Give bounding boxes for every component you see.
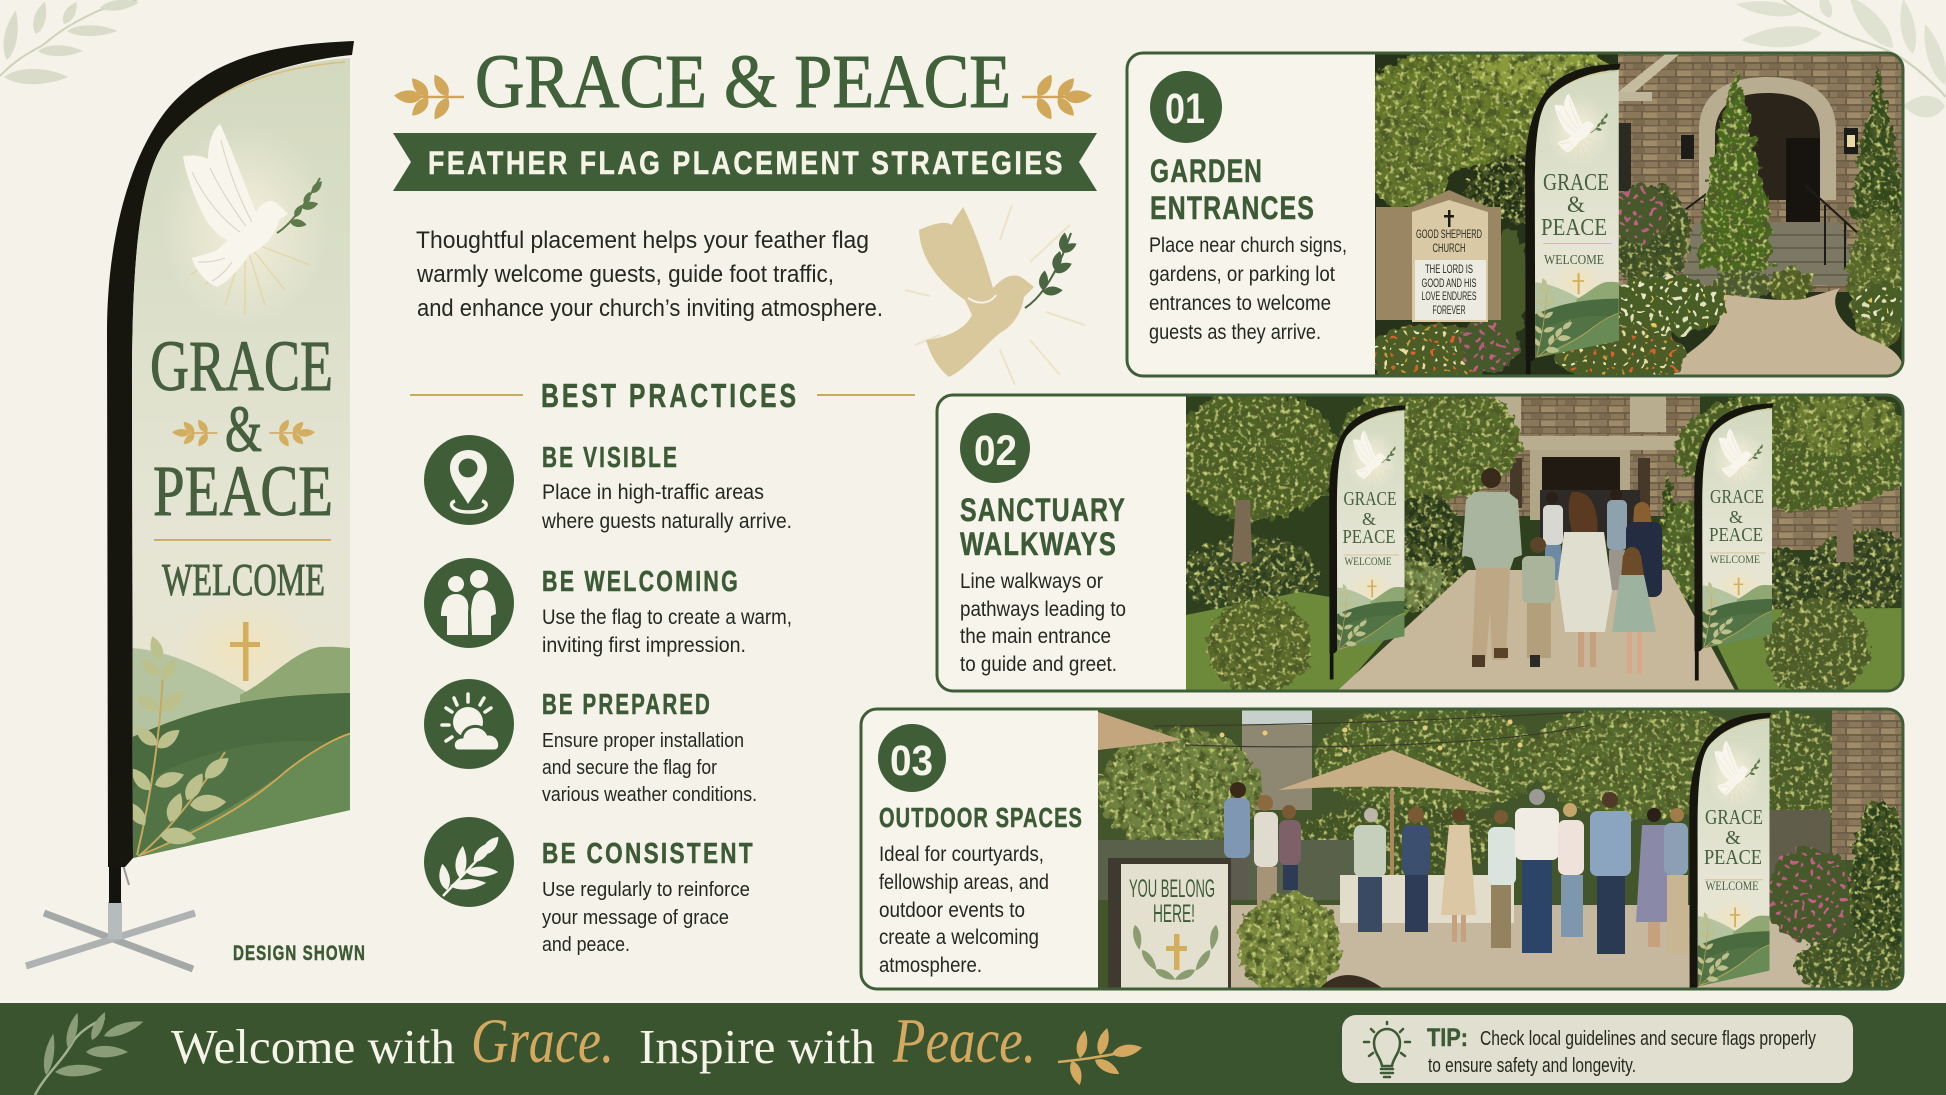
flag base <box>26 865 195 969</box>
decorative leaves: top left <box>0 0 139 84</box>
right mini flag: & <box>1729 507 1743 527</box>
subtitle banner: FEATHER FLAG PLACEMENT STRATEGIES <box>428 145 1065 181</box>
icon: sun and cloud <box>424 679 514 769</box>
courtyard ground <box>1220 905 1820 990</box>
number badge 02 <box>960 413 1030 483</box>
walkway <box>1336 570 1736 692</box>
photo: courtyard gathering <box>1098 700 1910 997</box>
footer slogan: Inspire with <box>639 1019 875 1074</box>
mini flag: GRACE <box>1705 805 1763 829</box>
tip text: to ensure safety and longevity. <box>1428 1055 1636 1077</box>
practice: be prepared: BE PREPARED <box>542 689 712 721</box>
subtitle banner <box>393 133 1097 191</box>
section heading: best practices: BEST PRACTICES <box>541 377 799 414</box>
description: pathways leading to <box>960 598 1126 621</box>
sign: you belong here: HERE! <box>1153 900 1195 928</box>
practice: be consistent: Use regularly to reinforce <box>542 879 750 901</box>
gathered people <box>1224 782 1688 954</box>
description <box>879 843 1049 977</box>
church sign: CHURCH <box>1432 241 1466 255</box>
arched entrance <box>1699 77 1836 200</box>
tree trunks <box>1232 500 1252 562</box>
flag lettering: WELCOME <box>162 554 325 605</box>
mini flag: WELCOME <box>1706 878 1759 893</box>
description: outdoor events to <box>879 899 1025 922</box>
flag lettering <box>150 326 333 605</box>
lanterns <box>1681 135 1694 159</box>
practice: be welcoming: Use the flag to create a warm, <box>542 606 792 629</box>
church stone wall <box>1618 52 1908 292</box>
intro paragraph: and enhance your church’s inviting atmosphere. <box>417 295 883 322</box>
panel 01: garden entrances <box>1127 40 1917 387</box>
mini flag: & <box>1725 827 1741 849</box>
description: gardens, or parking lot <box>1149 263 1335 286</box>
icon: two people <box>424 558 514 648</box>
flower beds <box>1368 185 1917 387</box>
heading <box>1150 153 1315 226</box>
string lights <box>1155 712 1590 747</box>
number badge 03 <box>878 724 946 792</box>
photo: family on walkway <box>1186 396 1902 690</box>
flag lettering: PEACE <box>153 451 333 531</box>
description <box>1149 234 1347 344</box>
lawns <box>1186 592 1410 692</box>
description: Ideal for courtyards, <box>879 843 1044 866</box>
practice: be prepared: Ensure proper installation <box>542 730 744 752</box>
mini flag: WELCOME <box>1544 253 1604 268</box>
right mini flag: PEACE <box>1709 524 1763 546</box>
flag lettering: & <box>225 393 262 466</box>
heading: WALKWAYS <box>960 526 1117 562</box>
number badge 03: 03 <box>890 737 933 785</box>
intro paragraph <box>416 227 883 322</box>
heading: GARDEN <box>1150 153 1263 189</box>
number badge 01 <box>1150 71 1222 143</box>
description: fellowship areas, and <box>879 871 1049 894</box>
practice: be welcoming: BE WELCOMING <box>542 566 740 598</box>
mini flag: PEACE <box>1704 845 1762 869</box>
icon: lightbulb <box>1364 1022 1410 1077</box>
left mini flag: & <box>1362 509 1376 529</box>
practice: be visible: BE VISIBLE <box>542 442 679 474</box>
practice: be consistent: BE CONSISTENT <box>542 838 755 870</box>
panel 03: outdoor spaces <box>861 700 1910 997</box>
sign: you belong here: YOU BELONG <box>1129 875 1215 903</box>
building <box>1440 396 1700 516</box>
mini flag <box>1689 713 1771 989</box>
footer sprig left <box>35 1010 145 1095</box>
church sign: GOOD AND HIS <box>1422 276 1476 290</box>
footer slogan: Grace. <box>471 1005 614 1076</box>
icon: location pin <box>424 435 514 525</box>
gold sprig right <box>1022 72 1092 123</box>
decorative leaves: top right <box>1735 0 1946 117</box>
table <box>1340 875 1514 923</box>
heading: ENTRANCES <box>1150 190 1315 226</box>
cypress trees <box>1610 68 1912 350</box>
tip text: Check local guidelines and secure flags properly <box>1480 1028 1816 1050</box>
practice: be visible: where guests naturally arrive. <box>541 510 792 533</box>
left mini flag: WELCOME <box>1344 554 1392 568</box>
heading <box>960 492 1126 562</box>
title: GRACE & PEACE <box>475 40 1011 124</box>
church sign: GOOD SHEPHERD <box>1416 227 1482 241</box>
description: Line walkways or <box>960 570 1103 593</box>
description: to guide and greet. <box>960 653 1117 676</box>
footer gold sprig <box>1058 1027 1143 1086</box>
flag gold sprigs <box>172 418 315 448</box>
icon: gold dove with olive branch <box>905 205 1085 385</box>
left mini flag: GRACE <box>1344 488 1396 510</box>
mini flag <box>1525 64 1620 378</box>
number badge 02: 02 <box>974 427 1017 475</box>
practice: be consistent: your message of grace <box>542 907 729 929</box>
flag lettering: GRACE <box>150 326 333 406</box>
footer slogan <box>171 1005 1036 1076</box>
left mini flag: PEACE <box>1342 526 1396 548</box>
steps and railing <box>1680 222 1862 285</box>
practice: be prepared: and secure the flag for <box>542 757 717 779</box>
walking family <box>1462 468 1662 674</box>
footer band <box>0 1003 1946 1095</box>
shrubs <box>1208 597 1870 697</box>
church sign: FOREVER <box>1432 303 1466 317</box>
right mini flag: GRACE <box>1710 486 1764 508</box>
photo: church garden entrance <box>1375 54 1902 374</box>
left mini flag <box>1329 405 1406 680</box>
sign: you belong here <box>1108 858 1231 990</box>
practice: be visible <box>424 435 792 533</box>
mini flag: PEACE <box>1541 215 1607 241</box>
practice: be welcoming: inviting first impression. <box>542 634 746 657</box>
practice: be welcoming <box>424 558 792 657</box>
brick wall <box>1832 710 1906 860</box>
umbrellas <box>1098 712 1182 750</box>
practice: be visible: Place in high-traffic areas <box>542 481 764 504</box>
description: entrances to welcome <box>1149 292 1331 315</box>
shrub foreground <box>1238 893 1342 997</box>
description: guests as they arrive. <box>1149 321 1321 344</box>
heading: SANCTUARY <box>960 492 1126 528</box>
tip text <box>1427 1024 1816 1077</box>
icon: leaf sprig <box>424 817 514 907</box>
number badge 01: 01 <box>1165 85 1205 133</box>
practice: be prepared: various weather conditions. <box>542 784 757 806</box>
tip text: TIP: <box>1427 1024 1468 1052</box>
description: Place near church signs, <box>1149 234 1347 257</box>
caption: design shown: DESIGN SHOWN <box>233 942 366 965</box>
description: the main entrance <box>960 625 1111 648</box>
shrubs and flowers <box>1765 847 1855 943</box>
practice: be consistent <box>424 817 755 956</box>
intro paragraph: warmly welcome guests, guide foot traffic, <box>416 261 834 288</box>
gold sprig left <box>394 72 464 123</box>
description: create a welcoming <box>879 926 1039 949</box>
right mini flag <box>1694 403 1773 680</box>
intro paragraph: Thoughtful placement helps your feather flag <box>416 227 869 254</box>
main feather flag with base <box>26 41 354 969</box>
practice: be prepared <box>424 679 757 806</box>
footer slogan: Peace. <box>892 1005 1036 1076</box>
garden path <box>1658 288 1902 374</box>
panel 02: sanctuary walkways <box>937 380 1925 697</box>
mini flag: GRACE <box>1543 170 1609 196</box>
heading: OUTDOOR SPACES <box>879 802 1083 833</box>
church sign <box>1376 190 1501 322</box>
church sign: THE LORD IS <box>1425 262 1473 276</box>
description <box>960 570 1126 676</box>
description: atmosphere. <box>879 954 982 977</box>
church sign: LOVE ENDURES <box>1422 289 1476 303</box>
mini flag: & <box>1567 192 1585 217</box>
practice: be consistent: and peace. <box>542 934 630 956</box>
footer slogan: Welcome with <box>171 1019 455 1074</box>
right mini flag: WELCOME <box>1710 552 1760 566</box>
tip box <box>1342 1015 1853 1083</box>
